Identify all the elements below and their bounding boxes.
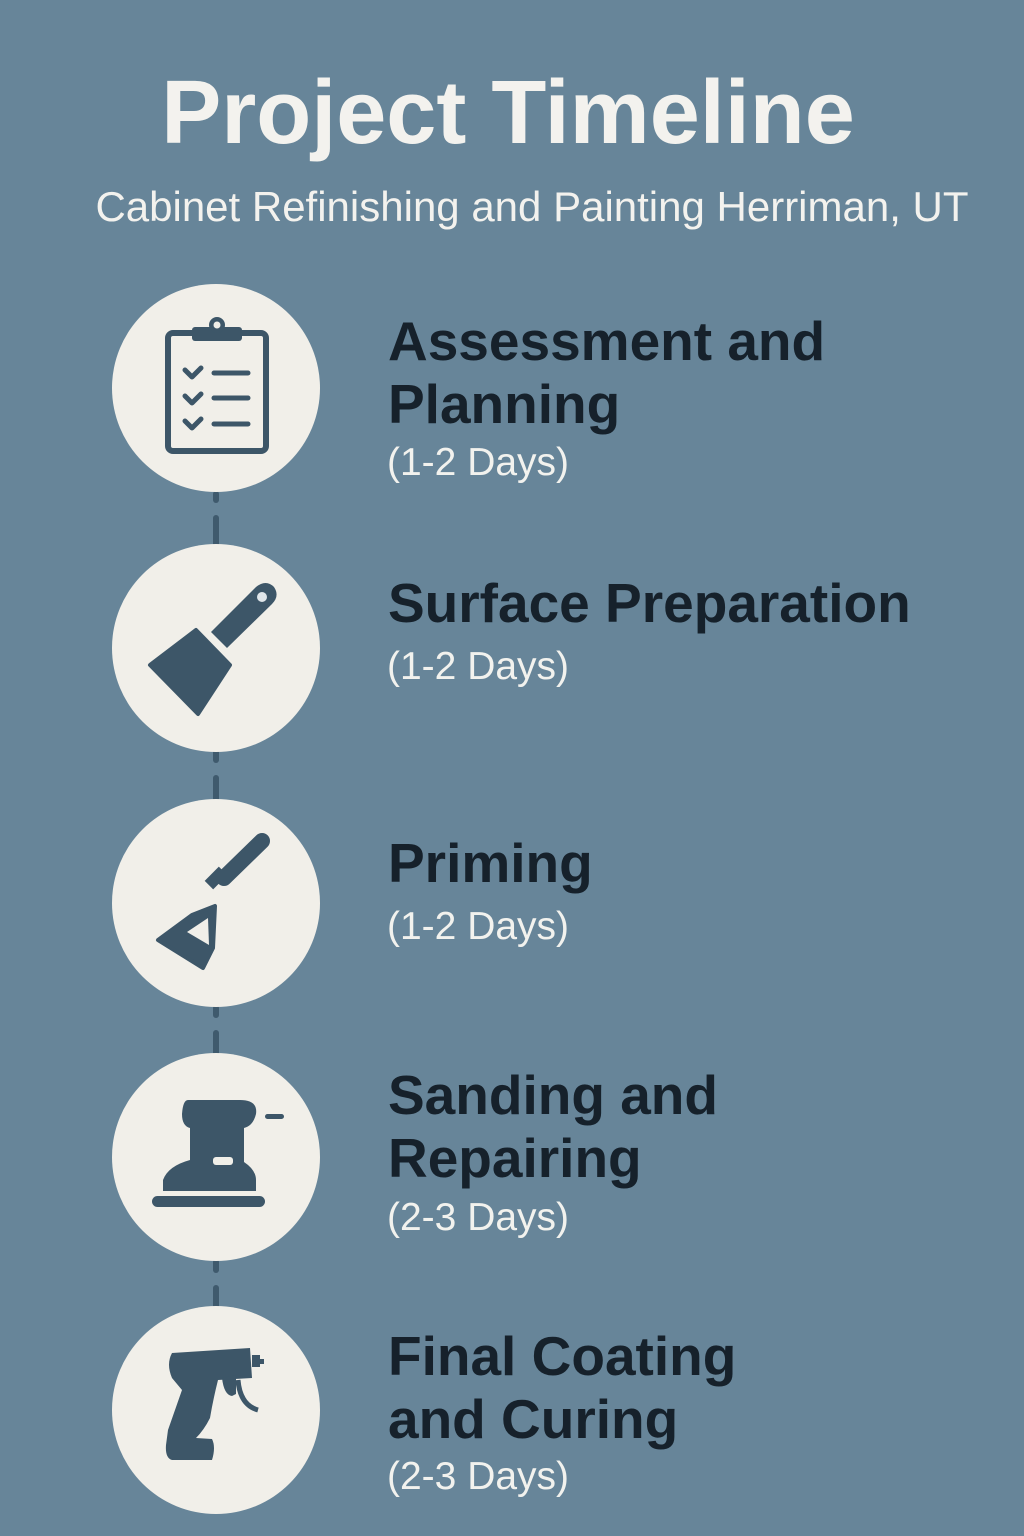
step 4 heading: Sanding and: [388, 1064, 718, 1126]
title: Project Timeline: [161, 63, 855, 163]
step 3 heading: Priming: [388, 832, 593, 894]
step 1 heading: Planning: [388, 373, 620, 435]
icon: clipboard: [112, 284, 320, 492]
step 5 heading: [388, 1325, 736, 1450]
step 2 duration: (1-2 Days): [387, 645, 569, 688]
icon: putty knife: [112, 544, 320, 752]
icon: scraper: [112, 799, 320, 1007]
connectors: [213, 494, 219, 1308]
step 4 duration: (2-3 Days): [387, 1196, 569, 1239]
step 4 heading: Repairing: [388, 1127, 642, 1189]
step 1 heading: Assessment and: [388, 310, 825, 372]
icon: spray gun: [112, 1306, 320, 1514]
step 1 duration: (1-2 Days): [387, 441, 569, 484]
step 4 heading: [388, 1064, 718, 1189]
step 5 heading: Final Coating: [388, 1325, 736, 1387]
icon: sander: [112, 1053, 320, 1261]
step 5 heading: and Curing: [388, 1388, 678, 1450]
step 2 heading: Surface Preparation: [388, 572, 911, 634]
step 1 heading: [388, 310, 825, 435]
step 3 duration: (1-2 Days): [387, 905, 569, 948]
subtitle: Cabinet Refinishing and Painting Herriman, UT: [95, 183, 969, 230]
step 5 duration: (2-3 Days): [387, 1455, 569, 1498]
